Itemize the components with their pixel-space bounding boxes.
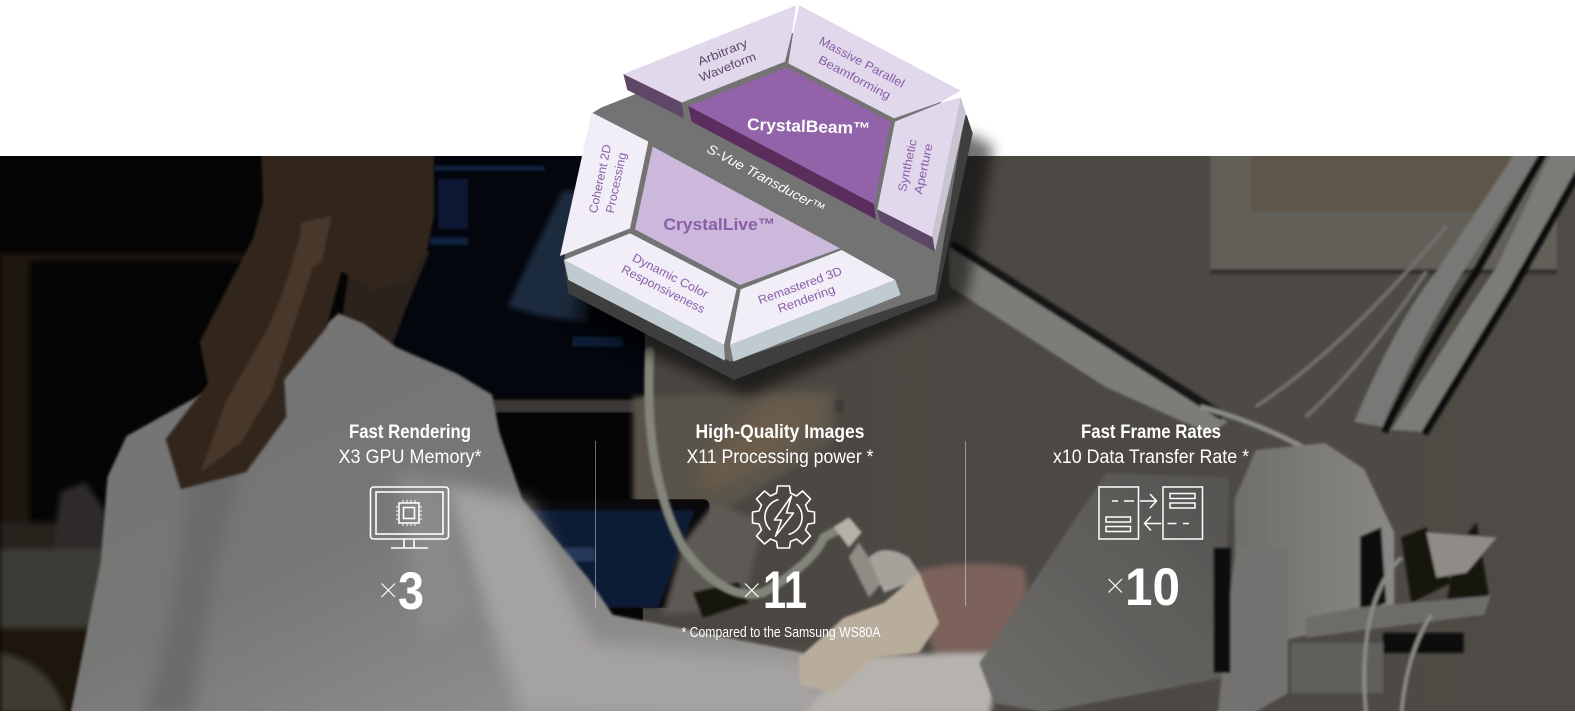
- panel: Arbitrary Waveform: Waveform: [697, 49, 758, 85]
- text: X3 GPU Memory: X3 GPU Memory*: [338, 447, 482, 468]
- panel: CrystalBeam: [688, 67, 891, 219]
- panel: Synthetic Aperture: [877, 97, 966, 252]
- panel: Dynamic Color Responsiveness: Responsiveness: [619, 262, 707, 316]
- neck: [342, 251, 430, 347]
- probe cable: [649, 352, 849, 594]
- probe and gloved hand: [799, 517, 939, 693]
- text: X11 Processing power: X11 Processing power *: [686, 447, 874, 468]
- column: High-Quality Images: [682, 422, 881, 641]
- stat: x3: 3: [398, 562, 424, 621]
- hexagon drop shadow: [573, 133, 993, 397]
- panel: Remastered 3D Rendering: Remastered 3D: [756, 264, 844, 307]
- stat: x11: 11: [763, 561, 807, 620]
- panel: Arbitrary Waveform: [623, 5, 796, 118]
- tablet: [522, 499, 763, 618]
- patient and towel: [804, 564, 1035, 715]
- panel: CrystalLive: CrystalLive™: [663, 215, 775, 234]
- panel: CrystalBeam: CrystalBeam™: [747, 115, 871, 138]
- stat: x3: [382, 562, 424, 621]
- panel: Arbitrary Waveform: Arbitrary: [696, 36, 749, 69]
- stat: x11: [745, 561, 807, 620]
- wall art frame: [1210, 151, 1557, 274]
- hexagon base: [563, 107, 973, 380]
- panel: Massive Parallel Beamforming: [788, 5, 961, 118]
- panel: Remastered 3D Rendering: Rendering: [776, 282, 837, 316]
- white coat: [70, 313, 884, 715]
- hexagon diagram: CrystalBeam, S-Vue Transducer, CrystalLive: [560, 5, 993, 397]
- panel: Synthetic Aperture: Synthetic: [895, 138, 920, 193]
- column: Fast Frame Rates: [1053, 422, 1250, 617]
- icon: data exchange documents: [1099, 487, 1202, 539]
- panel: Remastered 3D Rendering: [730, 250, 901, 362]
- divider lines: [596, 441, 966, 608]
- back room shelves: [0, 253, 245, 711]
- panel: Synthetic Aperture: Aperture: [911, 142, 936, 196]
- column: Fast Rendering: [338, 422, 482, 621]
- panel: CrystalLive: [635, 147, 840, 285]
- label: S-Vue Transducer: S-Vue Transducer™: [704, 141, 828, 216]
- panel: Coherent 2D Processing: Processing: [603, 151, 629, 214]
- panel: Dynamic Color Responsiveness: Dynamic Color: [630, 251, 711, 301]
- background photo: sonographer scanning a patient: [0, 151, 1575, 722]
- icon: monitor with chip: [370, 487, 448, 548]
- ultrasound monitor: [394, 151, 844, 512]
- hexagon gray plate: [564, 33, 965, 362]
- heading: Fast Rendering: Fast Rendering: [349, 422, 471, 443]
- panel: Coherent 2D Processing: [560, 112, 648, 256]
- panel: Coherent 2D Processing: Coherent 2D: [586, 143, 614, 215]
- ultrasound console and arm: [949, 151, 1575, 715]
- panel: Massive Parallel Beamforming: Massive Parallel: [817, 34, 907, 91]
- footnote: * Compared to the Samsung WS80A: [682, 625, 881, 641]
- heading: High-Quality Images: High-Quality Images: [696, 422, 864, 443]
- hair and ponytail: [166, 151, 434, 489]
- text: x10 Data Transfer Rate: x10 Data Transfer Rate *: [1053, 447, 1250, 468]
- panel: Dynamic Color Responsiveness: [564, 233, 737, 361]
- icon: gear with lightning bolt: [752, 486, 814, 548]
- stat: x10: 10: [1125, 558, 1180, 617]
- heading: Fast Frame Rates: Fast Frame Rates: [1081, 422, 1221, 443]
- panel: Massive Parallel Beamforming: Beamforming: [816, 53, 893, 102]
